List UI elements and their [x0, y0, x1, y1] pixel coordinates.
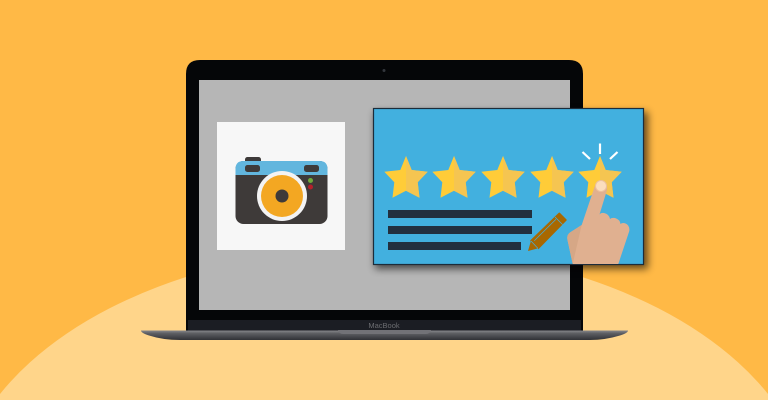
camera body	[236, 161, 328, 224]
panel shadow	[375, 112, 648, 269]
camera slot left	[245, 165, 260, 172]
card background	[217, 122, 345, 250]
rating panel	[374, 108, 644, 264]
fingertip	[596, 180, 606, 192]
laptop notch	[338, 330, 431, 334]
hand shadow side	[567, 225, 582, 264]
laptop screen	[199, 80, 570, 310]
star 1	[384, 156, 428, 198]
camera top button	[245, 157, 261, 165]
pointing hand	[567, 180, 629, 264]
camera slot right	[304, 165, 319, 172]
photo card with camera icon	[217, 122, 345, 250]
laptop base	[141, 330, 628, 340]
star 4	[530, 156, 574, 198]
laptop	[141, 60, 628, 340]
camera lens	[257, 171, 307, 221]
camera top band	[236, 161, 328, 175]
MacBook label: MacBook	[368, 321, 400, 330]
laptop lid	[186, 60, 583, 332]
laptop chin	[188, 320, 581, 331]
green light	[308, 178, 313, 183]
panel background	[374, 108, 644, 264]
background hill	[0, 247, 768, 400]
camera dot	[382, 69, 386, 72]
star 3	[481, 156, 525, 198]
red light	[308, 184, 313, 190]
pencil icon	[528, 213, 566, 251]
star 2	[432, 156, 476, 198]
star 5	[578, 156, 622, 198]
text lines	[388, 210, 532, 250]
sparkle lines	[582, 144, 618, 159]
